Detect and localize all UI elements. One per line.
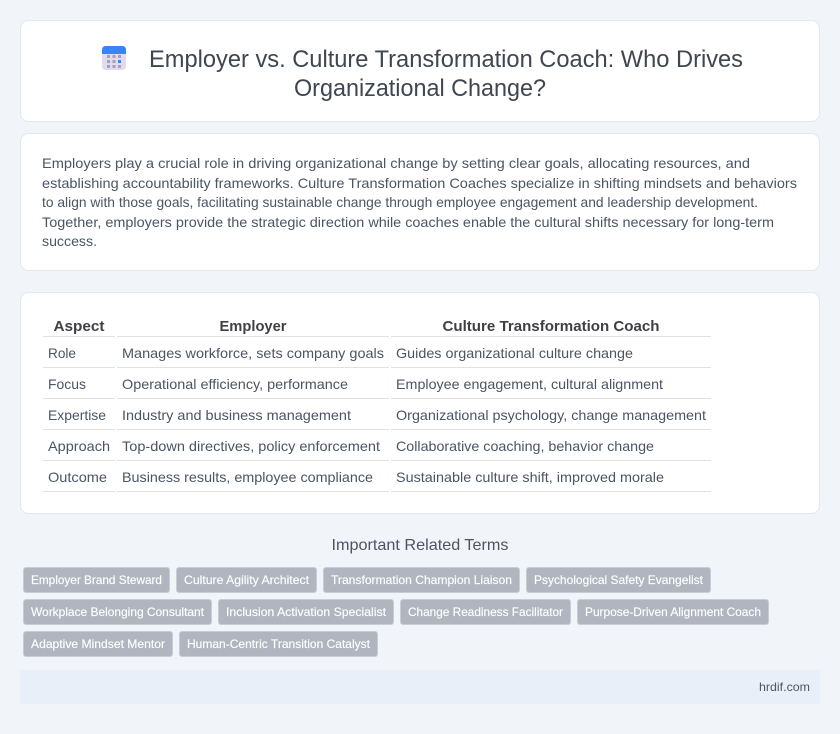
tag bbox=[400, 600, 570, 624]
title: Organizational Change? bbox=[294, 75, 546, 102]
tag: Human-Centric Transition Catalyst bbox=[187, 637, 371, 651]
tag bbox=[218, 600, 394, 624]
row: focus: Operational efficiency, performance bbox=[122, 376, 348, 392]
table header: Culture Transformation Coach bbox=[442, 318, 660, 335]
intro paragraph: Employers play a crucial role in driving organizational change by setting clear goals, allocating resources, and bbox=[42, 155, 750, 171]
tag: Change Readiness Facilitator bbox=[408, 605, 563, 619]
tag: Purpose-Driven Alignment Coach bbox=[585, 605, 761, 619]
title bbox=[149, 46, 743, 102]
tag bbox=[526, 568, 710, 592]
tag: Transformation Champion Liaison bbox=[331, 573, 512, 587]
row: role bbox=[48, 345, 633, 361]
row: focus: Employee engagement, cultural alignment bbox=[396, 376, 663, 392]
row: outcome: Sustainable culture shift, improved morale bbox=[396, 469, 664, 485]
panel: introduction text bbox=[20, 134, 820, 270]
row: focus: Focus bbox=[48, 376, 86, 392]
intro paragraph: to align with those goals, facilitating sustainable change through employee engagement and leadership development. bbox=[42, 194, 758, 210]
tag bbox=[24, 600, 212, 624]
tag: Employer Brand Steward bbox=[31, 573, 162, 587]
tag bbox=[578, 600, 768, 624]
row: expertise: Industry and business management bbox=[122, 407, 351, 423]
row: outcome bbox=[48, 469, 664, 485]
tag bbox=[24, 632, 172, 656]
row: role: Guides organizational culture change bbox=[396, 345, 633, 361]
row: approach: Collaborative coaching, behavior change bbox=[396, 438, 654, 454]
table header bbox=[54, 318, 660, 335]
intro paragraph bbox=[42, 155, 797, 249]
row: focus bbox=[48, 376, 663, 392]
footer: hrdif.com bbox=[759, 680, 810, 694]
row: role: Manages workforce, sets company goals bbox=[122, 345, 384, 361]
tag: Workplace Belonging Consultant bbox=[31, 605, 205, 619]
row: outcome: Outcome bbox=[48, 469, 107, 485]
table header: Employer bbox=[220, 318, 287, 335]
row: outcome: Business results, employee compliance bbox=[122, 469, 373, 485]
heading: related terms: Important Related Terms bbox=[332, 537, 508, 554]
row: approach: Top-down directives, policy enforcement bbox=[122, 438, 380, 454]
row: expertise bbox=[48, 407, 706, 423]
icon: calendar bbox=[102, 46, 126, 70]
intro paragraph: success. bbox=[42, 233, 97, 249]
row: approach bbox=[48, 438, 654, 454]
row: approach: Approach bbox=[48, 438, 110, 454]
row: role: Role bbox=[48, 345, 76, 361]
panel: comparison table bbox=[20, 292, 820, 514]
table header: Aspect bbox=[54, 318, 104, 335]
tag: Inclusion Activation Specialist bbox=[226, 605, 387, 619]
title: Employer vs. Culture Transformation Coach: Who Drives bbox=[149, 46, 743, 73]
intro paragraph: establishing accountability frameworks. Culture Transformation Coaches specialize in shifting mindsets and behaviors bbox=[42, 175, 797, 191]
tag bbox=[324, 568, 520, 592]
tag bbox=[176, 568, 316, 592]
tag bbox=[180, 632, 378, 656]
tag: Psychological Safety Evangelist bbox=[534, 573, 704, 587]
panel: title header bbox=[20, 20, 820, 122]
footer bbox=[20, 670, 820, 704]
tag bbox=[24, 568, 170, 592]
intro paragraph: Together, employers provide the strategic direction while coaches enable the cultural shifts necessary for long-term bbox=[42, 214, 774, 230]
tag: Culture Agility Architect bbox=[184, 573, 310, 587]
row: expertise: Organizational psychology, change management bbox=[396, 407, 706, 423]
related term tags bbox=[24, 568, 768, 656]
tag: Adaptive Mindset Mentor bbox=[31, 637, 165, 651]
row: expertise: Expertise bbox=[48, 407, 106, 423]
